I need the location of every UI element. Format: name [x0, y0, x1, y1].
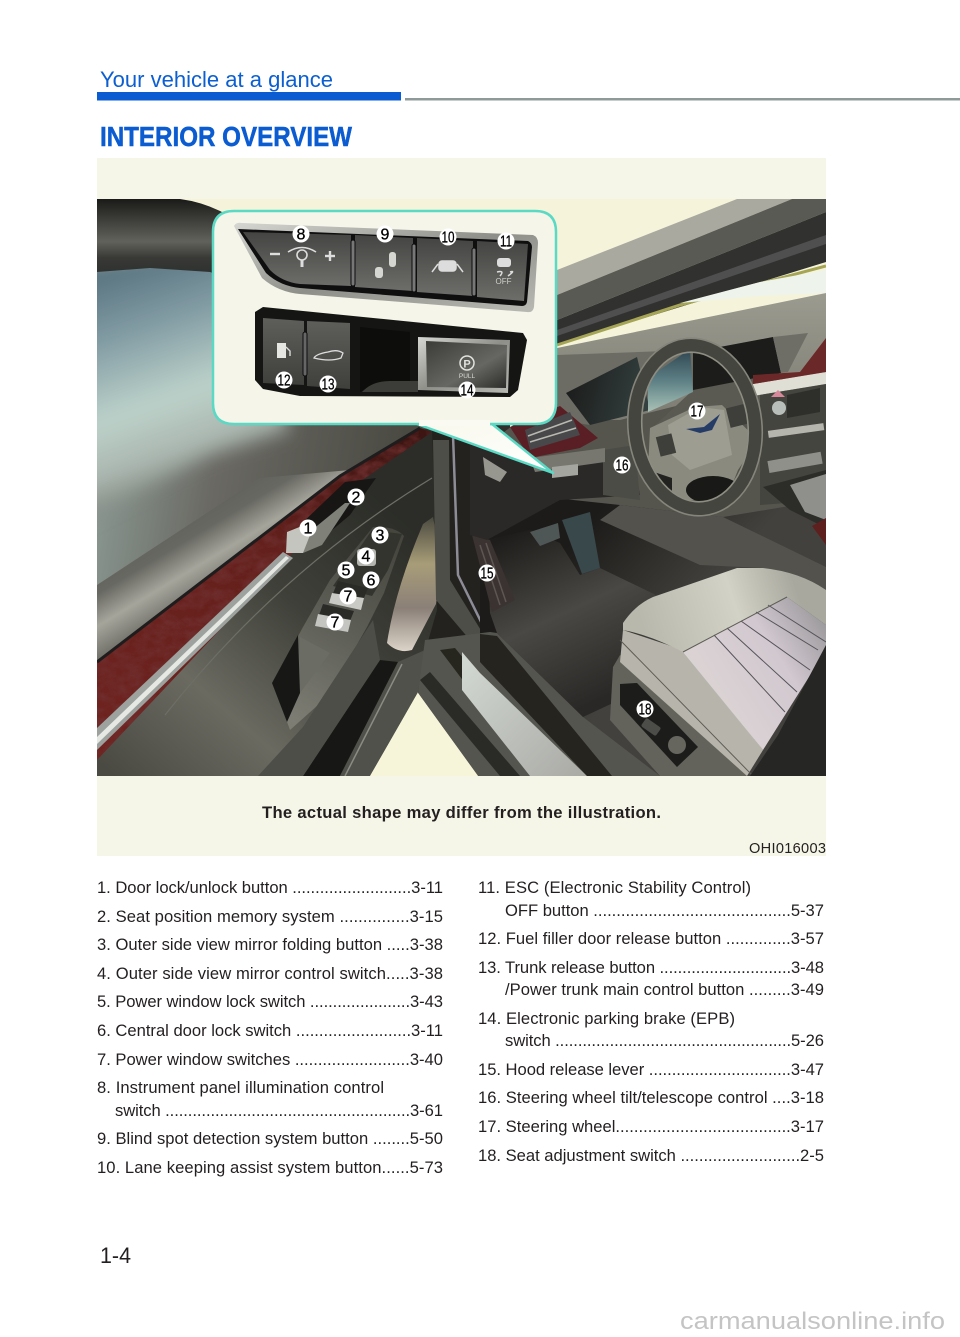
list: left column: 5. Power window lock switch ......................3-43 [97, 992, 443, 1011]
door handle recess [300, 478, 376, 530]
list: left column: 2. Seat position memory system ...............3-15 [97, 907, 443, 926]
windshield [680, 270, 826, 303]
number markers: 4 [362, 548, 371, 566]
screen [693, 337, 781, 392]
list: right column: /Power trunk main control button .........3-49 [505, 980, 824, 999]
number markers: 13 [322, 376, 335, 394]
list: right column: 17. Steering wheel......................................3-17 [478, 1117, 824, 1136]
centre stack [760, 384, 826, 505]
dash wood strip [753, 372, 826, 396]
steering wheel [619, 331, 771, 523]
number markers: 15 [480, 566, 494, 582]
list: left column: 10. Lane keeping assist system button......5-73 [97, 1158, 443, 1177]
dark line on wood [97, 428, 420, 662]
number markers: 7 [344, 588, 353, 606]
heading: interior overview: INTERIOR OVERVIEW [100, 121, 352, 152]
page number: 1-4 [100, 1243, 131, 1268]
list: right column: 12. Fuel filler door release button ..............3-57 [478, 929, 824, 948]
list: left column: 3. Outer side view mirror folding button .....3-38 [97, 935, 443, 954]
dashboard top [557, 293, 826, 420]
upper switch buttons [243, 232, 351, 286]
window switch rear [315, 614, 351, 632]
hood release lever [472, 536, 506, 602]
right vent [787, 388, 820, 418]
list: left column: 8. Instrument panel illumination control [97, 1078, 384, 1097]
icon: trunk car [314, 351, 343, 360]
illustration: car interior [60, 199, 826, 776]
icon: illumination control [270, 248, 335, 267]
list: left column: 9. Blind spot detection system button ........5-50 [97, 1129, 443, 1148]
list: right column: 11. ESC (Electronic Stability Control) [478, 878, 751, 897]
left black dash base [470, 445, 640, 540]
seat switches [641, 718, 661, 736]
A pillar band 1 [557, 199, 792, 295]
trunk button [307, 321, 350, 389]
door pillar foreground [750, 645, 826, 776]
list: right column: 13. Trunk release button .............................3-48 [478, 958, 824, 977]
wheel side controls [656, 433, 676, 457]
red console accent [812, 518, 826, 545]
image code: OHI016003 [749, 841, 826, 857]
number markers: 3 [376, 528, 385, 544]
number markers: 8 [297, 226, 306, 244]
yellow tag [483, 457, 507, 482]
carpet [487, 530, 660, 717]
EPB surround [418, 337, 510, 393]
list: left column: 1. Door lock/unlock button ..........................3-11 [97, 878, 443, 897]
recess step [362, 381, 418, 392]
list: right column: 16. Steering wheel tilt/telescope control ....3-18 [478, 1088, 824, 1107]
door contour line [165, 478, 432, 715]
left vent [525, 412, 580, 450]
armrest lip [258, 620, 380, 776]
hazard button [772, 401, 786, 415]
cream floor gap [370, 693, 478, 776]
door edge strip [433, 440, 480, 635]
number markers: 17 [690, 404, 704, 420]
icon: parking brake [459, 356, 476, 380]
icon: parking brake: PULL [459, 373, 476, 380]
door upper background [97, 425, 426, 585]
list: left column: 4. Outer side view mirror control switch.....3-38 [97, 964, 443, 983]
caption: The actual shape may differ from the illustration. [262, 803, 661, 822]
switch console [333, 530, 402, 596]
number markers: 11 [500, 234, 512, 250]
divider slots [351, 240, 355, 286]
number markers: 12 [278, 372, 291, 390]
wheel ring [627, 339, 763, 515]
cluster hood [557, 350, 693, 425]
lower switch housing [255, 307, 527, 397]
storage pocket [303, 660, 398, 776]
A pillar band 2 [557, 199, 826, 320]
icon: ESC off: OFF [496, 277, 512, 286]
icon: lane keeping [432, 261, 463, 272]
callout box [213, 211, 556, 424]
number markers: 18 [638, 702, 652, 718]
climate buttons [768, 423, 824, 438]
knee panel [603, 445, 640, 500]
door and jamb underlay [418, 425, 510, 700]
icon: blind spot [375, 252, 396, 278]
speaker [387, 517, 438, 651]
number markers [276, 226, 706, 718]
seat bolster [623, 568, 826, 652]
console side [600, 505, 826, 590]
switch panel [287, 527, 404, 730]
list: left column [97, 878, 443, 1177]
number markers: 7 [331, 614, 340, 632]
seat knob [668, 736, 686, 754]
seat side band [620, 630, 763, 776]
number markers: 1 [304, 520, 313, 538]
fuel filler button [263, 318, 304, 385]
instrument cluster [566, 357, 650, 425]
number markers: 14 [460, 382, 474, 400]
centre recess [360, 327, 410, 392]
door upper panel band [97, 470, 350, 668]
sill base [418, 632, 660, 776]
list: right column [478, 878, 824, 1165]
list: right column: switch ....................................................5-26 [505, 1031, 824, 1050]
panel: illustration background [97, 158, 826, 856]
seat side switch panel [620, 683, 698, 767]
lower dash background [480, 380, 826, 517]
number markers: 16 [616, 458, 629, 474]
upper switch housing [238, 229, 532, 306]
pedals [530, 523, 560, 546]
seat base front [610, 655, 747, 776]
pointer join [419, 420, 490, 426]
number markers: 2 [352, 490, 361, 506]
wheel background dash [650, 373, 790, 430]
gauge seen through wheel [648, 349, 693, 412]
pull handle opening [272, 635, 300, 722]
wheel opening [686, 476, 740, 504]
door jamb [428, 431, 480, 640]
A pillar band 3 [557, 212, 826, 345]
seat stitching [714, 605, 826, 712]
window switch housings [333, 581, 368, 598]
icon: parking brake: P [463, 358, 471, 370]
number markers: 10 [442, 230, 455, 246]
light switches [552, 464, 578, 478]
callout pointer [417, 424, 553, 473]
wood trim [97, 428, 432, 760]
wheel hub [648, 405, 758, 500]
list: right column: OFF button ...........................................5-37 [505, 901, 824, 920]
window switch front [329, 593, 364, 610]
list: left column: 6. Central door lock switch .........................3-11 [97, 1021, 443, 1040]
sill dark stripes [420, 672, 520, 776]
callout: button close-up [213, 211, 556, 473]
sill light strip [462, 652, 587, 776]
list: right column: 14. Electronic parking brake (EPB) [478, 1009, 735, 1028]
EPB button [426, 341, 507, 388]
watermark: carmanualsonline.info [680, 1308, 945, 1335]
door window glass [97, 268, 296, 504]
list: left column: 7. Power window switches .........................3-40 [97, 1050, 443, 1069]
icon: fuel pump [277, 343, 290, 358]
number markers: 9 [381, 226, 390, 244]
section header: Your vehicle at a glance: Your vehicle at a glance [100, 67, 333, 92]
wheel logo [686, 414, 720, 433]
list: left column: switch ......................................................3-61 [115, 1101, 443, 1120]
sill dark band [480, 634, 612, 776]
door handle [286, 527, 310, 553]
left vent surround [510, 406, 598, 458]
door window frame [97, 199, 222, 273]
dash strip above switches [530, 448, 605, 472]
windshield yellow strip [557, 266, 826, 345]
icon: ESC off [496, 258, 513, 286]
floor [480, 470, 826, 776]
list: right column: 15. Hood release lever ...............................3-47 [478, 1060, 824, 1079]
gear console [763, 470, 826, 528]
upper switch surround [234, 223, 538, 312]
section header: Your vehicle at a glance [97, 67, 960, 100]
door lower panel [97, 432, 437, 776]
silver trim strip [97, 552, 293, 750]
door bottom strip [340, 650, 425, 776]
list: right column: 18. Seat adjustment switch ..........................2-5 [478, 1146, 824, 1165]
number markers: 6 [367, 572, 376, 590]
seat centre panel [683, 597, 826, 750]
number markers: 5 [342, 562, 351, 580]
